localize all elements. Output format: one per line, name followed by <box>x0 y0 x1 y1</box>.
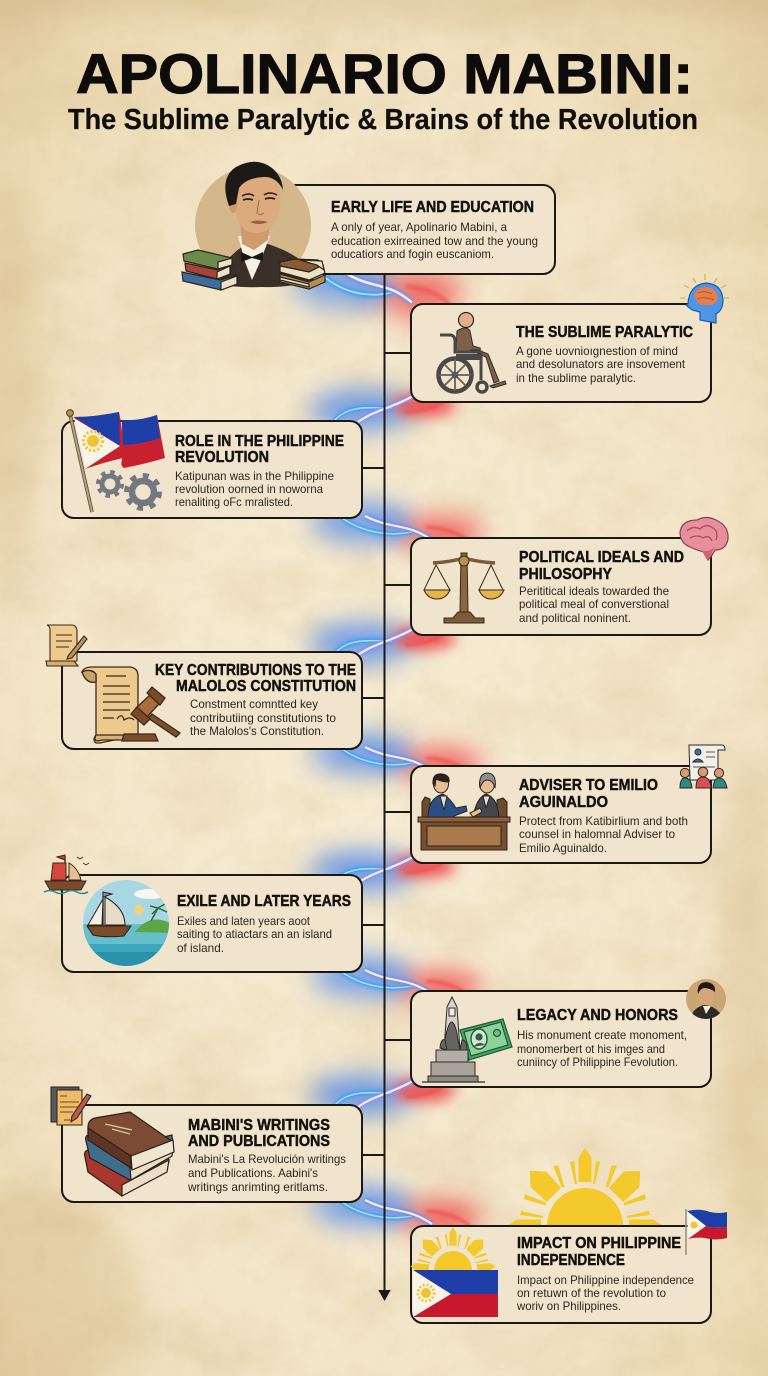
icon: banknote <box>460 1019 512 1060</box>
body text: Exiles and laten years aoot <box>177 914 311 928</box>
heading: LEGACY AND HONORS <box>517 1007 678 1024</box>
panel: adviser to emilio aguinaldo <box>411 745 727 863</box>
body text: counsel in halomnal Adviser to <box>519 827 675 841</box>
stack of books left <box>182 250 237 290</box>
icon: two men at desk <box>418 773 510 850</box>
body text <box>187 1152 346 1194</box>
body text: Perititical ideals towarded the <box>519 584 669 598</box>
body text: on retuwn of the revolution to <box>517 1286 666 1300</box>
heading: KEY CONTRIBUTIONS TO THE <box>155 662 356 679</box>
body text <box>516 1273 694 1313</box>
body text: and political noninent. <box>519 611 631 625</box>
panel: key contributions to the malolos constitution <box>46 625 362 749</box>
panel: mabini's writings and publications: AND PUBLICATIONS <box>188 1133 330 1150</box>
panel: legacy and honors <box>411 979 726 1087</box>
body text: Constment comntted key <box>190 697 318 711</box>
timeline spine with arrow <box>362 270 412 1299</box>
body text: Katipunan was in the Philippine <box>175 469 334 483</box>
heading: ROLE IN THE PHILIPPINE <box>175 433 344 450</box>
body text <box>175 469 334 509</box>
body text <box>519 814 688 855</box>
body text: saiting to atiactars an an island <box>177 927 332 941</box>
body text: woriv on Philippines. <box>516 1299 621 1313</box>
body text: writings anrimting eritlams. <box>187 1180 328 1194</box>
glowing nerve ribbons between cards <box>292 255 482 1235</box>
body text: education exirreained tow and the young <box>331 234 538 248</box>
panel: role in the philippine revolution: REVOLUTION <box>175 449 269 466</box>
icon: brain <box>680 518 728 560</box>
big sun behind final card <box>507 1148 663 1264</box>
body text <box>516 344 686 385</box>
icon: Mabini medallion <box>686 979 726 1020</box>
body text <box>519 584 669 625</box>
body text: His monument create monoment, <box>517 1028 687 1042</box>
heading: POLITICAL IDEALS AND <box>519 549 684 566</box>
icon: Mabini portrait with books <box>182 162 325 290</box>
body text: renaliting oFc mralisted. <box>175 495 293 509</box>
body text: revolution oorned in noworna <box>175 482 323 496</box>
body text: Mabini's La Revolución writings <box>188 1152 346 1166</box>
icon: small waving flag <box>686 1209 727 1255</box>
heading: EXILE AND LATER YEARS <box>177 893 351 910</box>
panel: the sublime paralytic <box>411 274 729 402</box>
heading: THE SUBLIME PARALYTIC <box>516 324 693 341</box>
icon: wheelchair <box>438 312 506 392</box>
panel: adviser to emilio aguinaldo: AGUINALDO <box>519 794 608 811</box>
body text: political meal of converstional <box>519 597 669 611</box>
body text: in the sublime paralytic. <box>516 371 636 385</box>
icon: constitution scroll with gavel <box>82 667 180 743</box>
icon: waving flag on pole <box>67 410 165 512</box>
heading: MABINI'S WRITINGS <box>188 1117 330 1134</box>
body text: monomerbert ot his imges and <box>517 1042 665 1056</box>
body text <box>177 914 332 955</box>
title <box>68 42 698 136</box>
panel: political ideals and philosophy: PHILOSOPHY <box>519 566 613 583</box>
panel: impact on philippine independence: INDEPENDENCE <box>517 1252 625 1269</box>
panel: exile and later years <box>44 855 362 972</box>
body text <box>190 697 336 738</box>
icon: document and advisers <box>680 745 727 788</box>
panel: political ideals and philosophy <box>411 518 728 635</box>
icon: sailboat roundel <box>83 880 169 966</box>
icon: Rizal monument <box>422 997 485 1082</box>
body text: the Malolos's Constitution. <box>190 724 324 738</box>
panel: role in the philippine revolution <box>62 410 362 518</box>
body text: Protect from Katibirlium and both <box>519 814 688 828</box>
subtitle: The Sublime Paralytic & Brains of the Revolution <box>68 104 698 136</box>
icon: small red-sail boat <box>44 855 89 894</box>
panel: impact on philippine independence <box>410 1209 727 1323</box>
body text <box>517 1028 687 1069</box>
icon: brain in head <box>680 274 729 323</box>
icon: documents with pen <box>51 1087 91 1125</box>
icon: sun over philippine flag <box>410 1227 498 1317</box>
body text <box>331 220 538 261</box>
panel: key contributions to the malolos constitution: MALOLOS CONSTITUTION <box>176 678 356 695</box>
body text: contributiing constitutions to <box>190 711 336 725</box>
body text: cuniincy of Philippine Fevolution. <box>517 1055 678 1069</box>
body text: and desolunators are insovement <box>516 357 686 371</box>
body text: Emilio Aguinaldo. <box>519 841 607 855</box>
body text: of island. <box>177 941 224 955</box>
body text: oducatiors and fogin euscaniom. <box>331 247 494 261</box>
icon: stack of books <box>85 1112 174 1196</box>
icon: small scroll with quill <box>46 625 87 666</box>
title: APOLINARIO MABINI: <box>76 42 693 105</box>
stack of books right <box>280 259 325 289</box>
heading: EARLY LIFE AND EDUCATION <box>331 199 534 216</box>
panel: early life and education <box>182 162 555 290</box>
heading: ADVISER TO EMILIO <box>519 777 658 794</box>
panel: mabini's writings and publications <box>51 1087 362 1202</box>
icon: scales of justice <box>424 553 504 623</box>
heading: IMPACT ON PHILIPPINE <box>517 1235 681 1252</box>
body text: A only of year, Apolinario Mabini, a <box>331 220 507 234</box>
body text: and Publications. Aabini's <box>188 1166 318 1180</box>
icon: gears <box>98 472 160 508</box>
body text: Impact on Philippine independence <box>517 1273 694 1287</box>
body text: A gone uovnioıgnestion of mind <box>516 344 678 358</box>
